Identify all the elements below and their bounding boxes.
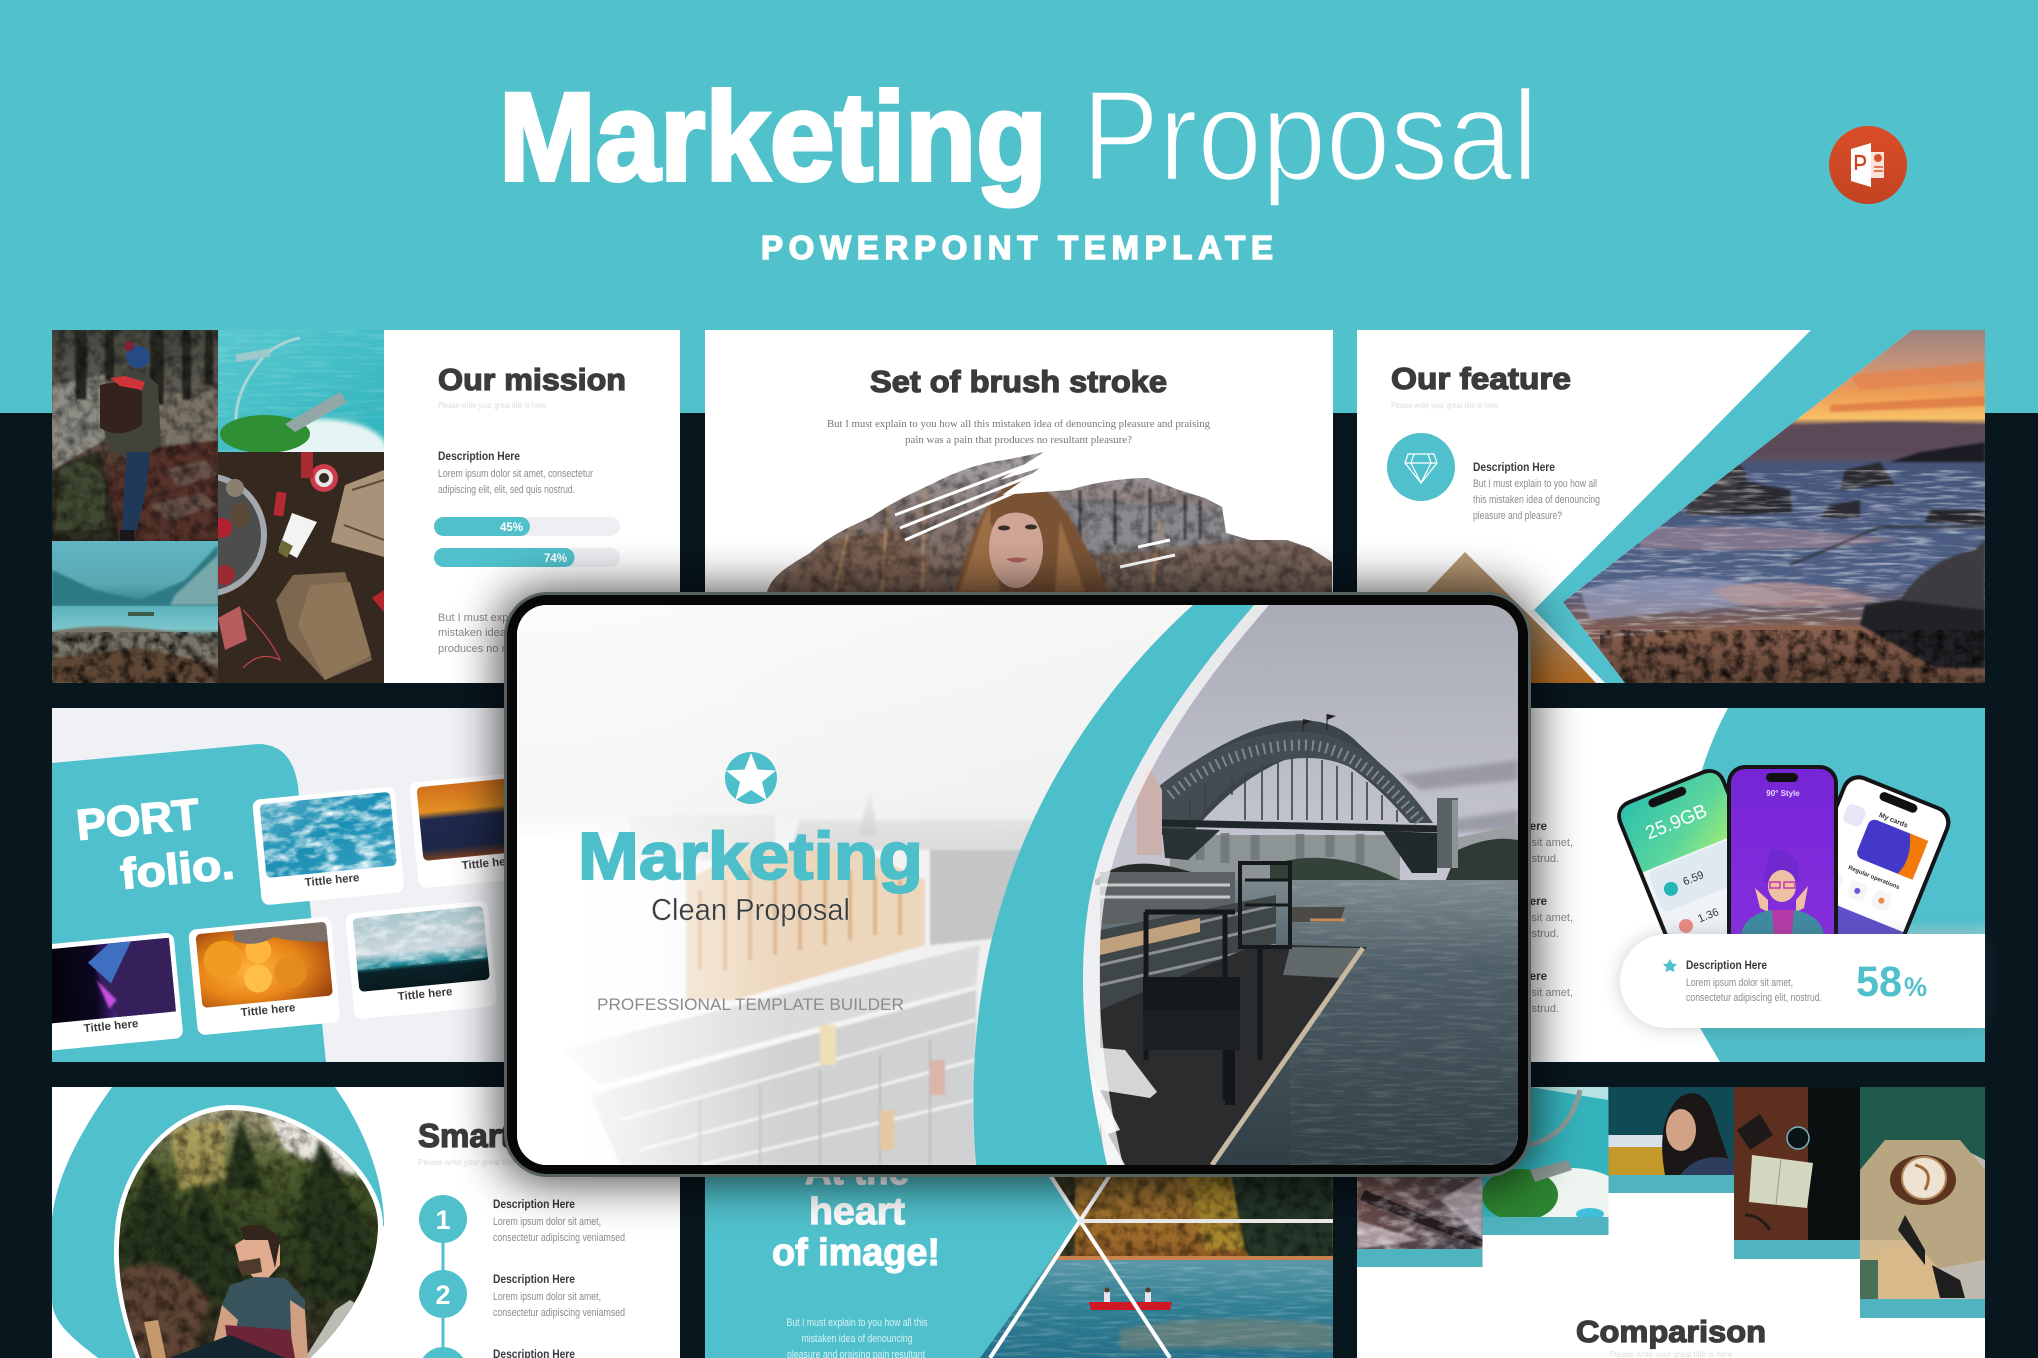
step 2 text: consectetur adipiscing veniamsed [493,1307,625,1319]
description text: Lorem ipsum dolor sit amet, [1686,977,1793,989]
card: purple dome [52,933,183,1050]
teal diagonal band [1534,330,1912,683]
step 2 text: Description Here [493,1274,575,1286]
photo: latte in hands [1858,1087,1985,1323]
body paragraph: produces no resultant pleasure? [438,643,595,655]
stat: 58 percent: % [1904,972,1927,1002]
panel: our feature slide [1340,330,1985,683]
hidden descriptions: consectetur elit, nostrud. [1439,928,1559,940]
body paragraph [438,612,645,655]
title: Marketing Proposal: Proposal [1082,65,1538,208]
cover title: Marketing: Marketing [578,819,923,894]
callout pill [1620,934,1985,1028]
cover subtitle: Clean Proposal: Clean Proposal [651,892,850,927]
photo: autumn forest and lake [980,1170,1335,1358]
card: sunset [410,774,504,888]
card: sunset: Tittle here [461,855,517,872]
card: orange bokeh [188,916,341,1036]
step 1 text: Description Here [493,1199,575,1211]
description text: consectetur adipiscing elit, nostrud. [1686,992,1822,1004]
body paragraph: But I must explain to you how all this [438,612,616,624]
description block [1473,462,1600,522]
hidden descriptions: Lorem ipsum dolor sit amet, [1437,837,1573,849]
tablet mockup [506,594,1530,1176]
stat: 58 percent [1856,958,1927,1006]
description block: pleasure and pleasure? [1473,510,1562,522]
hidden descriptions: consectetur elit, nostrud. [1439,1003,1559,1015]
photo: woman in brush stroke mask [760,445,1335,595]
step 2 number: 2 [435,1280,451,1310]
hidden descriptions: Lorem ipsum dolor sit amet, [1437,987,1573,999]
heading: at the heart of image: heart [809,1191,905,1233]
panel: smart idea slide [52,1087,680,1358]
heading: PORT folio: PORT [74,790,201,850]
tablet screen: cover slide [517,605,1518,1165]
card: blue marble: Tittle here [304,872,360,889]
phones [1617,765,1950,934]
title: Marketing Proposal: Marketing [499,68,1047,207]
description block: Lorem ipsum dolor sit amet, consectetur [438,468,593,480]
teal rounded shape [52,744,326,1062]
white dividing lines [990,1175,1333,1358]
photo: craft desk flat lay [218,452,384,683]
heading: PORT folio: folio. [118,840,236,899]
step 1 text: consectetur adipiscing veniamsed [493,1232,625,1244]
card: purple dome: Tittle here [83,1018,139,1035]
tablet frame [506,594,1530,1176]
description block: Description Here [1473,462,1555,474]
card: ocean wave: Tittle here [397,986,453,1003]
heading: at the heart of image [772,1151,940,1274]
description block: Description Here [438,451,520,463]
photo: island aerial [1482,1087,1608,1217]
faded photo area [517,605,1217,1165]
stat: 58 percent: 58 [1856,958,1902,1006]
hidden descriptions [1437,821,1573,1015]
phone: left storage app: 1.36 [1696,906,1721,925]
timeline connector [442,1242,444,1348]
hidden descriptions: Lorem ipsum dolor sit amet, [1437,912,1573,924]
photo: smiling woman [1608,1087,1734,1175]
panel: at the heart of image slide [705,1177,1333,1358]
body text on teal [786,1317,928,1358]
icon: PowerPoint logo [1829,126,1907,204]
card: blue marble [252,786,405,906]
serif paragraph: But I must explain to you how all this mistaken idea of denouncing pleasure and praising [827,418,1210,430]
white sliver [1528,610,1605,683]
phone: right cards app [1838,775,1950,934]
step 1 number: 1 [435,1205,451,1235]
photo: hiker in forest [52,330,218,541]
card: orange bokeh: Tittle here [240,1002,296,1019]
step 2 text: Lorem ipsum dolor sit amet, [493,1291,601,1303]
hidden descriptions: Description Here [1455,896,1547,908]
description block: this mistaken idea of denouncing [1473,494,1600,506]
heading: our feature: Our feature [1391,361,1571,396]
progress bar 45%: 45% [500,522,523,534]
title: Marketing Proposal [499,65,1538,208]
heading: our mission: Our mission [438,362,626,397]
panel: our mission slide [52,330,680,683]
translucent white band [1083,605,1269,1165]
description block: adipiscing elit, elit, sed quis nostrud. [438,484,575,496]
serif paragraph [827,418,1210,446]
photo: map and coffee on table [1734,1087,1860,1240]
teal arc background [1681,708,1985,1062]
body text on teal: But I must explain to you how all this [786,1317,928,1329]
step 2 text [493,1274,625,1319]
heading: smart idea: Smart idea [418,1117,587,1154]
triangle building photo [1340,552,1598,683]
photo: harbour bridge [1090,714,1518,1165]
panel: portfolio slide [52,708,504,1062]
phone: right cards app: Regular operations [1847,865,1901,891]
heading: at the heart of image: At the [805,1151,909,1193]
phone: center purple app: 90° Style [1766,789,1800,798]
phone: right cards app: My cards [1878,812,1909,830]
teal curved swoosh [974,605,1254,1165]
description text: Description Here [1686,960,1767,972]
step 3 number [422,1347,464,1358]
description text [1686,960,1822,1004]
cover tagline: PROFESSIONAL TEMPLATE BUILDER [597,995,904,1014]
photo: teal mountain lake [52,541,218,683]
teal blob [52,1087,384,1358]
heading: at the heart of image: of image! [772,1232,940,1274]
icon: diamond in circle [1387,433,1455,501]
card: ocean wave [345,900,498,1020]
photo: rocky sea at sunset [1540,330,1985,683]
description block: But I must explain to you how all [1473,478,1597,490]
teal captions [1357,1175,1985,1318]
callout pill shadow [1620,934,1985,1028]
hidden descriptions: consectetur elit, nostrud. [1439,853,1559,865]
description block [438,451,593,496]
icon: star [1663,959,1677,972]
phone: left storage app [1617,769,1727,934]
hidden descriptions: Description Here [1455,821,1547,833]
subtitle text: Please write your great title is here [418,1158,541,1167]
photo: snowy forest [1357,1177,1482,1249]
step 1 text [493,1199,625,1244]
panel: set of brush stroke slide [705,330,1333,592]
progress bar 74%: 74% [544,553,567,565]
icon: star in circle [725,752,777,804]
body paragraph: mistaken idea of denouncing pleasure and [438,627,645,639]
phone: left storage app: 6.59 [1681,869,1706,888]
photo: tropical island aerial [218,330,384,452]
step 1 number [419,1195,467,1243]
tablet drop shadow [500,590,1534,1182]
serif paragraph: pain was a pain that produces no resultant pleasure? [905,434,1132,446]
heading: set of brush stroke: Set of brush stroke [870,364,1167,399]
panel: app mockup slide [1531,708,1987,1062]
panel: comparison slide [1357,1087,1985,1358]
progress bar 45% [434,517,620,536]
step 2 number [419,1270,467,1318]
subtitle text: Please write your great title is here [1391,401,1498,410]
subtitle: PowerPoint template: POWERPOINT TEMPLATE [761,229,1273,266]
phone: left storage app: 25.9GB [1643,801,1710,844]
heading: comparison: Comparison [1576,1314,1766,1349]
photo: man in forest [110,1105,385,1358]
progress bar 74% [434,548,620,567]
subtitle text: Please write your great title is here [438,401,546,410]
step 1 text: Lorem ipsum dolor sit amet, [493,1216,601,1228]
heading: PORT folio [77,798,234,890]
hidden descriptions: Description Here [1455,971,1547,983]
body text on teal: mistaken idea of denouncing [802,1333,912,1345]
phone: center purple app [1727,765,1838,934]
